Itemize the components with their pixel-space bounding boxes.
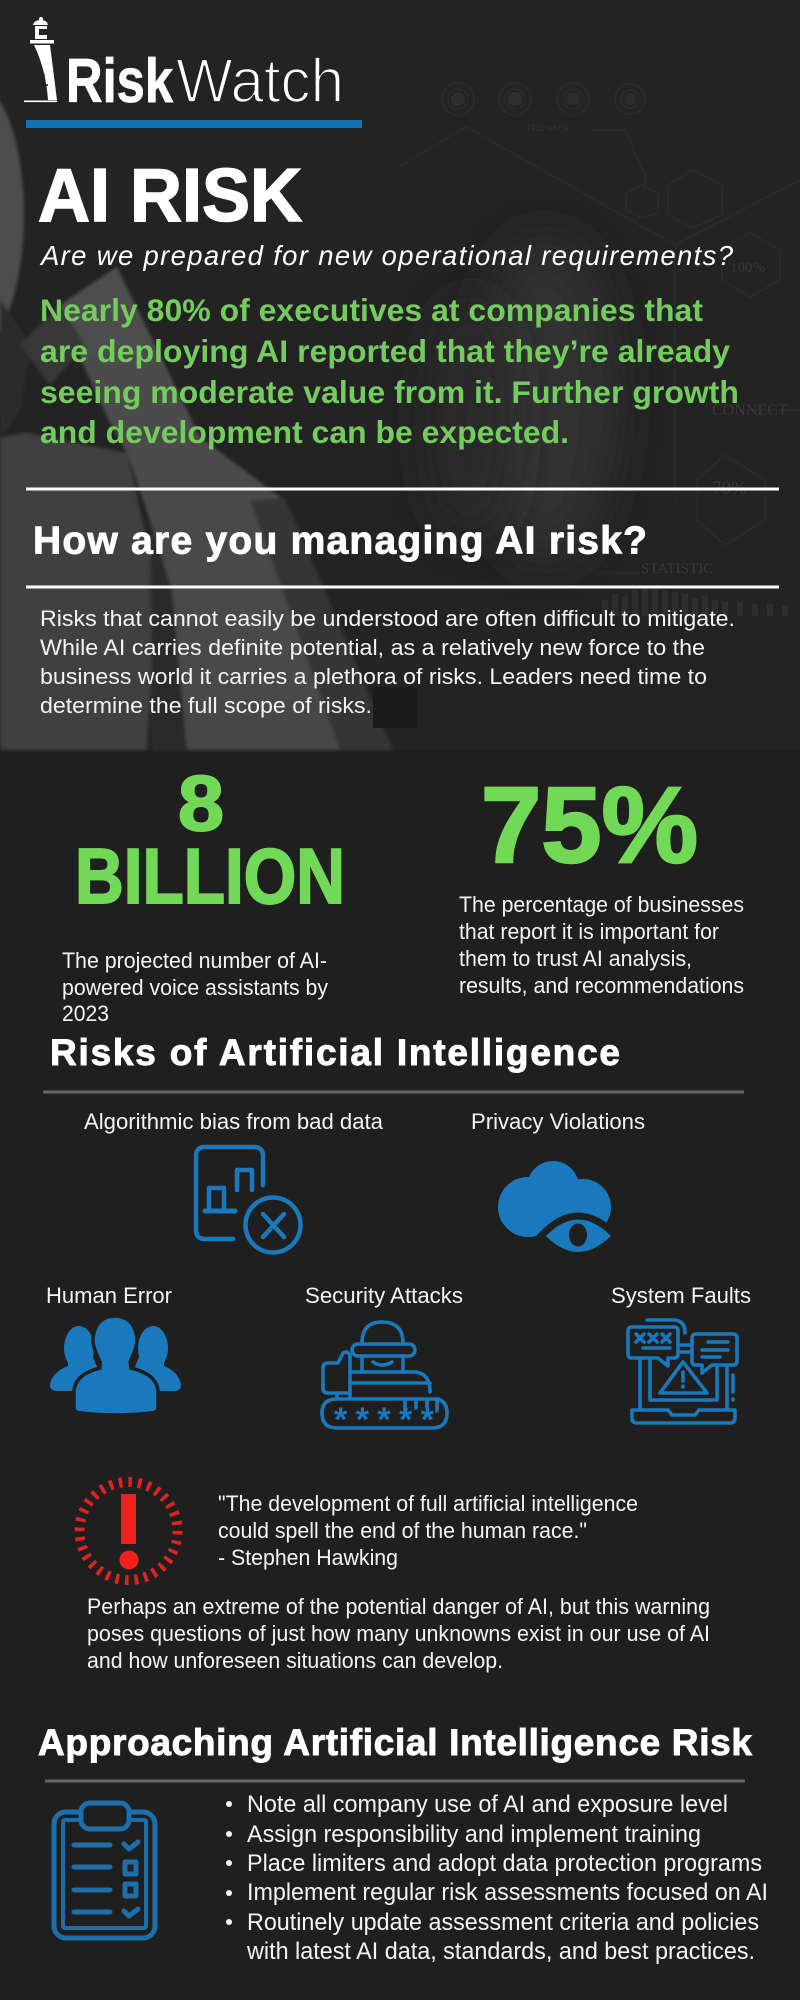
green intro statement (40, 292, 739, 450)
intro paragraph: business world it carries a plethora of risks. Leaders need time to (40, 664, 707, 689)
logo: RiskWatch lighthouse and wordmark: Risk (66, 47, 173, 116)
commentary paragraph: Perhaps an extreme of the potential danger of AI, but this warning (87, 1594, 710, 1619)
stat description: voice assistants: The projected number of AI- (62, 948, 327, 973)
commentary paragraph: and how unforeseen situations can develop. (87, 1648, 503, 1673)
logo: RiskWatch lighthouse and wordmark (24, 17, 344, 116)
subtitle: Are we prepared for new operational requirements? (39, 240, 734, 271)
heading rule bottom (26, 586, 779, 588)
quote: Stephen Hawking: could spell the end of the human race." (218, 1518, 587, 1543)
risk: privacy violations: Privacy Violations (471, 1109, 645, 1134)
green intro statement: Nearly 80% of executives at companies that (40, 292, 704, 328)
stat description: trust in AI: that report it is important for (459, 919, 719, 944)
intro paragraph: determine the full scope of risks. (40, 693, 372, 718)
stat: 8 billion: 8 (178, 759, 224, 847)
hero background image: robot and data overlay: 100% (730, 260, 765, 276)
heading: how are you managing AI risk: How are you managing AI risk? (33, 520, 647, 562)
stat description: voice assistants: 2023 (62, 1001, 109, 1026)
stat: 8 billion (62, 759, 345, 1026)
stat description: voice assistants: powered voice assistants by (62, 975, 328, 1000)
bullet list: approach steps (226, 1791, 768, 1965)
bullet list: approach steps: Note all company use of AI and exposure level (247, 1791, 728, 1818)
risk: system faults: System Faults (611, 1283, 751, 1308)
icon: chart with x (196, 1147, 300, 1252)
bullet list: approach steps: Assign responsibility and implement training (247, 1821, 701, 1848)
green intro statement: seeing moderate value from it. Further growth (40, 374, 739, 410)
hero background image: robot and data overlay: CONNECT (712, 402, 788, 419)
stat: 8 billion: BILLION (75, 832, 345, 920)
risk: human error: Human Error (46, 1283, 172, 1308)
quote: Stephen Hawking: "The development of full artificial intelligence (218, 1491, 638, 1516)
risk: security attacks (305, 1283, 463, 1439)
section divider (45, 1780, 745, 1782)
icon: laptop with warning (628, 1320, 737, 1423)
stat: 75 percent (459, 764, 744, 998)
title: AI RISK (38, 153, 302, 237)
stat description: voice assistants (62, 948, 328, 1026)
icon: cloud with eye (498, 1161, 616, 1256)
risk: human error (46, 1283, 181, 1415)
blue header bar (26, 120, 362, 128)
intro paragraph: While AI carries definite potential, as a relatively new force to the (40, 635, 705, 660)
risk: algorithmic bias (84, 1109, 384, 1252)
bullet list: approach steps: with latest AI data, standards, and best practices. (246, 1938, 755, 1965)
risk: privacy violations (471, 1109, 645, 1256)
quote: Stephen Hawking: - Stephen Hawking (218, 1545, 398, 1570)
bullet list: approach steps: Place limiters and adopt data protection programs (247, 1850, 762, 1877)
heading rule top (26, 488, 779, 490)
stat description: trust in AI: results, and recommendations (459, 973, 744, 998)
risk: system faults (611, 1283, 751, 1423)
icon: group of people (50, 1316, 181, 1415)
stat description: trust in AI: them to trust AI analysis, (459, 946, 692, 971)
icon: lighthouse (24, 17, 57, 102)
green intro statement: are deploying AI reported that they’re already (40, 333, 730, 369)
commentary paragraph (87, 1594, 710, 1673)
heading: risks of artificial intelligence: Risks of Artificial Intelligence (50, 1032, 620, 1073)
risk: security attacks: Security Attacks (305, 1283, 463, 1308)
commentary paragraph: poses questions of just how many unknowns exist in our use of AI (87, 1621, 710, 1646)
stat: 75 percent: 75% (481, 764, 698, 885)
section divider (43, 1090, 744, 1094)
green intro statement: and development can be expected. (40, 414, 569, 450)
bullet list: approach steps: Implement regular risk assessments focused on AI (247, 1879, 768, 1906)
hero background image: robot and data overlay: FEEDBACK (527, 124, 569, 133)
icon: clipboard checklist (54, 1803, 155, 1938)
logo: RiskWatch lighthouse and wordmark: Watch (176, 47, 344, 116)
intro paragraph: Risks that cannot easily be understood are often difficult to mitigate. (40, 606, 735, 631)
bullet list: approach steps: Routinely update assessment criteria and policies (247, 1909, 759, 1936)
hero background image: robot and data overlay: STATISTIC (641, 561, 713, 577)
icon: hacker with keyboard (322, 1322, 447, 1439)
icon: hacker with keyboard: ***** (334, 1401, 435, 1439)
hero background image: robot and data overlay (0, 0, 800, 750)
quote: Stephen Hawking (218, 1491, 638, 1570)
hero background image: robot and data overlay: 70% (712, 478, 747, 499)
risk: algorithmic bias: Algorithmic bias from bad data (84, 1109, 384, 1134)
intro paragraph (40, 606, 735, 718)
stat description: trust in AI (459, 892, 744, 998)
heading: approaching artificial intelligence risk: Approaching Artificial Intelligence Risk (38, 1722, 752, 1763)
stat description: trust in AI: The percentage of businesses (459, 892, 744, 917)
icon: red warning burst (80, 1482, 178, 1580)
